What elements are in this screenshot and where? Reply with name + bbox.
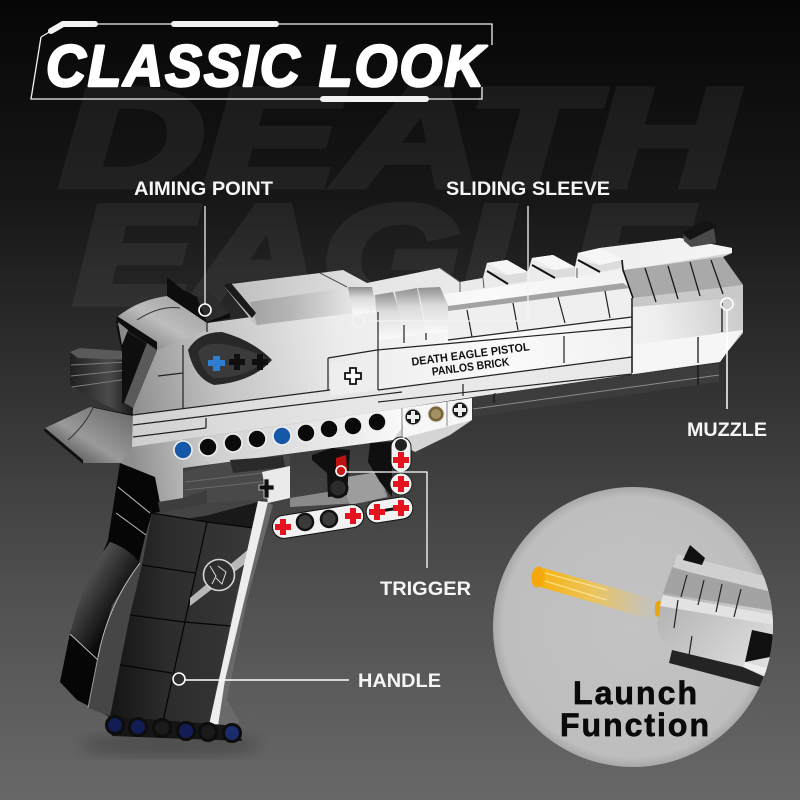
callout: muzzle: MUZZLE	[687, 420, 767, 441]
name plate: DEATH EAGLE PISTOL	[411, 341, 530, 369]
grip front strap	[209, 501, 273, 728]
callout: sliding sleeve: SLIDING SLEEVE	[446, 179, 610, 200]
technic beams	[259, 437, 414, 540]
launch: gun muzzle detail	[657, 545, 780, 687]
callout: handle: HANDLE	[358, 671, 441, 692]
cross plate	[330, 357, 377, 396]
trigger levers	[290, 442, 392, 507]
callout: sliding sleeve	[352, 179, 610, 327]
connector block	[402, 398, 472, 438]
callout: handle	[173, 671, 441, 692]
rear sight	[167, 277, 230, 323]
callout: trigger: TRIGGER	[380, 579, 471, 600]
grip side panels	[110, 500, 263, 725]
hammer	[70, 348, 135, 432]
pistol	[44, 220, 743, 757]
callout: aiming point: AIMING POINT	[134, 179, 273, 200]
title frame	[31, 24, 492, 99]
frame pin plate	[188, 332, 272, 385]
watermark text: death eagle: EAGLE	[74, 176, 694, 333]
callout: aiming point	[134, 179, 273, 316]
slide and frame body	[132, 238, 743, 447]
watermark text: death eagle	[60, 59, 739, 333]
title: CLASSIC LOOK	[46, 35, 488, 99]
grip back strap	[60, 463, 160, 717]
watermark text: death eagle: DEATH	[60, 59, 739, 216]
row of holes	[174, 413, 386, 459]
slide stepped blocks	[487, 248, 622, 284]
callout: trigger	[336, 466, 471, 600]
panel: launch function	[493, 487, 780, 767]
grip shadow	[80, 733, 260, 757]
muzzle block	[622, 257, 743, 373]
launch: text: Launch	[573, 675, 697, 711]
front sight	[683, 220, 716, 247]
grip bottom pins	[106, 716, 242, 742]
launch: text: Function	[560, 707, 709, 743]
grip emblem	[190, 548, 250, 606]
dark under rail	[473, 363, 719, 417]
slide serrations and panel lines	[133, 291, 632, 437]
launch: text	[560, 675, 709, 743]
slide top surface	[223, 238, 732, 340]
launch: bullet	[530, 566, 663, 620]
name plate: PANLOS BRICK	[431, 356, 511, 379]
beaver tail	[44, 407, 133, 464]
lower frame	[120, 408, 472, 513]
name plate	[411, 341, 530, 379]
callout: muzzle	[687, 298, 767, 441]
rear slide top	[116, 296, 207, 408]
